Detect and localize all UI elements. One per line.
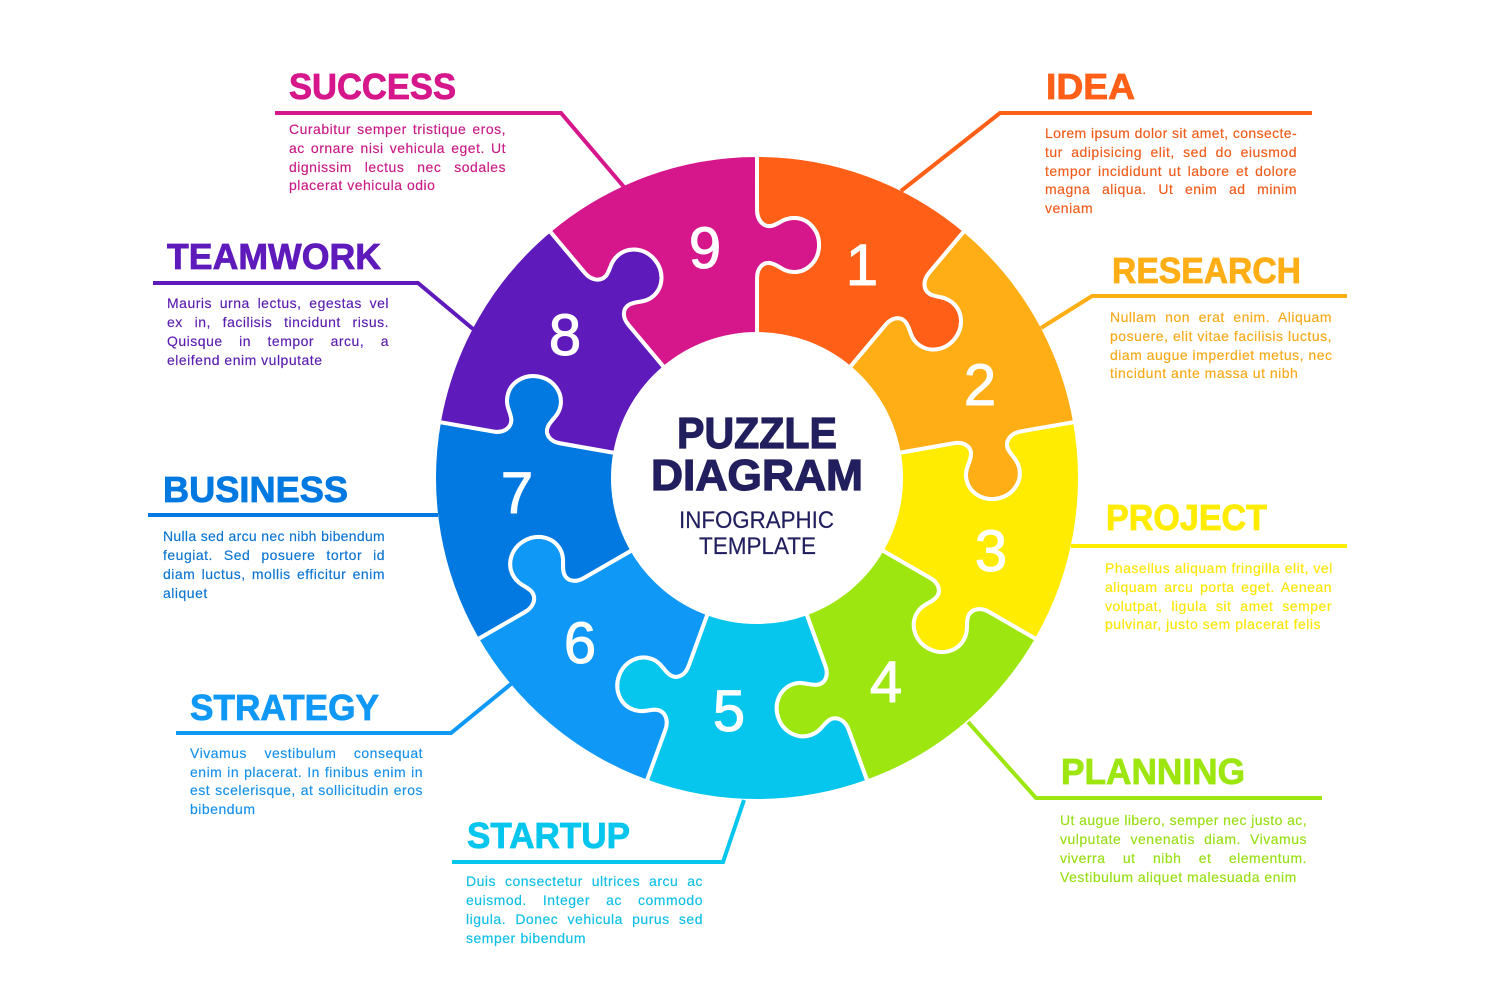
- leader line: idea: [900, 111, 1312, 192]
- text: business body: diam luctus, mollis efficitur enim: [163, 566, 385, 582]
- puzzle piece 8: 8: [549, 303, 581, 368]
- subheading: infographic template: INFOGRAPHIC: [679, 507, 834, 534]
- text: strategy body: bibendum: [190, 801, 256, 817]
- puzzle piece 9: [549, 97, 845, 394]
- text: teamwork body: ex in, facilisis tincidunt risus.: [167, 314, 389, 330]
- puzzle piece 2: 2: [964, 353, 996, 418]
- text: idea body: [1045, 125, 1297, 216]
- text: startup body: semper bibendum: [466, 930, 586, 946]
- puzzle piece 4: 4: [870, 650, 902, 715]
- puzzle piece 3: 3: [975, 519, 1007, 584]
- text: research body: posuere, elit vitae facilisis luctus,: [1110, 328, 1332, 344]
- text: teamwork body: eleifend enim vulputate: [167, 352, 322, 368]
- heading: research: RESEARCH: [1112, 250, 1301, 291]
- leader line: planning: [966, 720, 1322, 800]
- puzzle piece 2: [828, 231, 1124, 527]
- text: project body: aliquam arcu porta eget. Aenean: [1105, 579, 1332, 595]
- panel: strategy: [176, 682, 512, 817]
- puzzle piece 5: [600, 582, 867, 853]
- text: strategy body: enim in placerat. In finibus enim in: [190, 764, 423, 780]
- heading: project: PROJECT: [1106, 497, 1267, 538]
- leader line: success: [275, 111, 626, 188]
- puzzle piece 7: [373, 353, 661, 640]
- puzzle piece 9: 9: [689, 216, 721, 281]
- text: idea body: tur adipisicing elit, sed do eiusmod: [1045, 144, 1297, 160]
- leader line: startup: [452, 799, 746, 864]
- text: project body: volutpat, ligula sit amet semper: [1105, 598, 1332, 614]
- text: planning body: vulputate venenatis diam. Vivamus: [1060, 831, 1307, 847]
- puzzle piece 8: [439, 217, 684, 459]
- heading: planning: PLANNING: [1061, 751, 1245, 792]
- text: business body: Nulla sed arcu nec nibh bibendum: [163, 528, 385, 544]
- leader line: business: [148, 513, 438, 517]
- leader line: teamwork: [153, 281, 474, 330]
- heading: startup: STARTUP: [467, 815, 630, 856]
- heading: puzzle diagram: PUZZLE: [677, 410, 837, 458]
- text: research body: [1110, 309, 1332, 381]
- panel: teamwork: [153, 236, 474, 368]
- text: idea body: veniam: [1045, 200, 1093, 216]
- heading: business: BUSINESS: [163, 469, 348, 510]
- text: idea body: tempor incididunt ut labore et dolore: [1045, 163, 1297, 179]
- text: business body: [163, 528, 385, 602]
- subheading: infographic template: [679, 507, 834, 560]
- puzzle piece 5: 5: [713, 679, 745, 744]
- text: startup body: euismod. Integer ac commodo: [466, 892, 703, 908]
- text: planning body: Ut augue libero, semper nec justo ac,: [1060, 812, 1307, 828]
- puzzle piece 6: [451, 511, 719, 782]
- text: project body: [1105, 560, 1333, 632]
- text: planning body: viverra ut nibh et elementum.: [1060, 850, 1307, 866]
- panel: planning: [966, 720, 1322, 886]
- leader line: project: [1071, 544, 1347, 548]
- text: success body: [289, 121, 506, 194]
- heading: idea: IDEA: [1046, 66, 1135, 107]
- text: strategy body: est scelerisque, at sollicitudin eros: [190, 782, 423, 798]
- text: success body: ac ornare nisi vehicula eget. Ut: [289, 140, 506, 156]
- puzzle wheel: [436, 157, 1078, 799]
- puzzle piece 1: [757, 155, 965, 368]
- text: research body: diam augue imperdiet metus, nec: [1110, 347, 1332, 363]
- text: teamwork body: Quisque in tempor arcu, a: [167, 333, 389, 349]
- text: success body: Curabitur semper tristique eros,: [289, 121, 506, 137]
- text: startup body: ligula. Donec vehicula purus sed: [466, 911, 703, 927]
- text: success body: dignissim lectus nec sodales: [289, 159, 506, 175]
- text: strategy body: [190, 745, 423, 817]
- leader line: strategy: [176, 682, 512, 735]
- puzzle piece 6: 6: [564, 611, 596, 676]
- text: research body: tincidunt ante massa ut nibh: [1110, 365, 1298, 381]
- text: strategy body: Vivamus vestibulum consequat: [190, 745, 423, 761]
- puzzle piece 7: 7: [501, 461, 533, 526]
- text: idea body: Lorem ipsum dolor sit amet, consecte-: [1045, 125, 1297, 141]
- text: startup body: [466, 873, 703, 946]
- text: planning body: Vestibulum aliquet malesuada enim: [1060, 869, 1297, 885]
- panel: project: [1071, 497, 1347, 632]
- text: project body: pulvinar, justo sem placerat felis: [1105, 616, 1321, 632]
- text: project body: Phasellus aliquam fringilla elit, vel: [1105, 560, 1333, 576]
- panel: research: [1040, 250, 1347, 381]
- heading: puzzle diagram: [651, 409, 863, 500]
- panel: startup: [452, 799, 746, 946]
- puzzle piece 1: 1: [846, 233, 878, 298]
- panel: business: [148, 469, 438, 602]
- text: business body: feugiat. Sed posuere tortor id: [163, 547, 385, 563]
- heading: success: SUCCESS: [289, 66, 456, 107]
- panel: idea: [900, 66, 1312, 216]
- puzzle piece 3: [866, 422, 1111, 663]
- leader line: research: [1040, 294, 1347, 330]
- text: research body: Nullam non erat enim. Aliquam: [1110, 309, 1332, 325]
- text: startup body: Duis consectetur ultrices arcu ac: [466, 873, 703, 889]
- text: idea body: magna aliqua. Ut enim ad minim: [1045, 181, 1297, 197]
- subheading: infographic template: TEMPLATE: [699, 533, 816, 560]
- text: success body: placerat vehicula odio: [289, 177, 435, 193]
- heading: teamwork: TEAMWORK: [167, 236, 381, 277]
- text: business body: aliquet: [163, 585, 208, 601]
- puzzle piece 4: [749, 533, 1037, 819]
- panel: success: [275, 66, 626, 194]
- text: teamwork body: [167, 295, 389, 368]
- heading: strategy: STRATEGY: [190, 687, 379, 728]
- heading: puzzle diagram: DIAGRAM: [651, 451, 863, 500]
- center title: [651, 410, 863, 560]
- text: planning body: [1060, 812, 1307, 886]
- text: teamwork body: Mauris urna lectus, egestas vel: [167, 295, 389, 311]
